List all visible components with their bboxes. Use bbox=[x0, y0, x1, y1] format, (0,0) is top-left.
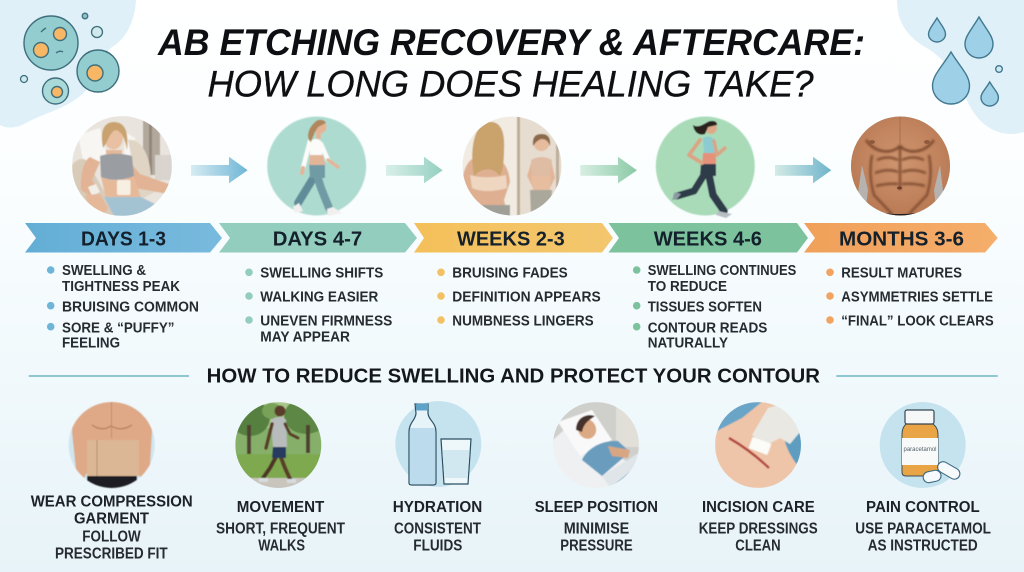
ribbon: weeks 4-6: WEEKS 4-6 bbox=[654, 228, 762, 251]
tip: movement: WALKS bbox=[258, 537, 305, 554]
photo: man walking in park bbox=[235, 402, 322, 488]
bullet list: days 4-7: MAY APPEAR bbox=[260, 329, 350, 345]
tip: incision care: KEEP DRESSINGS bbox=[699, 520, 818, 537]
bullet list: days 4-7 bbox=[245, 266, 393, 345]
tip: sleep position: MINIMISE bbox=[564, 520, 629, 537]
photo: final abs bbox=[850, 116, 952, 218]
bullet list: weeks 4-6: SWELLING CONTINUES bbox=[648, 263, 797, 279]
bullet list: days 4-7: WALKING EASIER bbox=[260, 290, 379, 306]
tip: pain control: AS INSTRUCTED bbox=[868, 537, 978, 554]
bullet list: weeks 2-3: DEFINITION APPEARS bbox=[452, 290, 601, 306]
tip: compression garment: WEAR COMPRESSION bbox=[31, 494, 193, 511]
bullet list: months 3-6: ASYMMETRIES SETTLE bbox=[841, 290, 993, 306]
photo: running bbox=[656, 116, 755, 218]
tip: hydration: FLUIDS bbox=[413, 537, 462, 554]
bullet list: months 3-6: “FINAL” LOOK CLEARS bbox=[841, 313, 994, 329]
icon: paracetamol bottle and pills: paracetamol bbox=[904, 446, 937, 453]
bullet list: weeks 4-6: NATURALLY bbox=[648, 336, 728, 352]
tip: compression garment: PRESCRIBED FIT bbox=[55, 545, 168, 562]
bullet list: weeks 4-6: TO REDUCE bbox=[648, 279, 727, 295]
photo: dressing an incision bbox=[715, 402, 802, 488]
bullet list: days 1-3: BRUISING COMMON bbox=[62, 300, 199, 316]
bullet list: weeks 2-3: NUMBNESS LINGERS bbox=[452, 313, 594, 329]
bullet list: days 1-3 bbox=[47, 263, 199, 352]
decorative blob top left with cells bbox=[0, 0, 136, 128]
ribbon: weeks 2-3 bbox=[414, 223, 613, 252]
section heading: HOW TO REDUCE SWELLING AND PROTECT YOUR CONTOUR bbox=[207, 366, 821, 388]
tip: pain control: USE PARACETAMOL bbox=[855, 520, 991, 537]
photo: mirror check bbox=[462, 116, 562, 216]
tip: hydration: CONSISTENT bbox=[394, 520, 481, 537]
icon: medium cell bbox=[77, 50, 119, 92]
bullet list: days 1-3: SORE & “PUFFY” bbox=[62, 320, 174, 336]
photo: man sleeping on back bbox=[553, 402, 640, 490]
tip: sleep position bbox=[535, 402, 658, 554]
bullet list: weeks 4-6 bbox=[633, 263, 797, 352]
icon: small cell bbox=[42, 78, 68, 104]
bullet list: weeks 2-3 bbox=[437, 266, 601, 329]
tip: sleep position: PRESSURE bbox=[560, 537, 633, 554]
ribbon: days 1-3 bbox=[25, 223, 222, 252]
icon: large cell bbox=[24, 16, 78, 70]
bullet list: days 1-3: TIGHTNESS PEAK bbox=[62, 279, 180, 295]
ribbon: months 3-6 bbox=[804, 223, 998, 252]
tip: movement: MOVEMENT bbox=[237, 499, 325, 516]
photo: resting after surgery bbox=[72, 116, 172, 216]
arrow: step 4 to 5 bbox=[775, 157, 831, 183]
tip: pain control bbox=[855, 402, 991, 554]
arrow: step 2 to 3 bbox=[386, 157, 443, 183]
tip: incision care bbox=[699, 402, 818, 554]
tip: incision care: CLEAN bbox=[735, 537, 781, 554]
ribbon: days 4-7: DAYS 4-7 bbox=[273, 228, 362, 251]
ribbon: weeks 2-3: WEEKS 2-3 bbox=[457, 228, 565, 251]
ribbon: days 4-7 bbox=[219, 223, 417, 252]
photo: waist binder bbox=[69, 398, 155, 490]
bullet list: days 4-7: UNEVEN FIRMNESS bbox=[260, 313, 393, 329]
icon: bubbles bbox=[20, 13, 102, 83]
tip: hydration bbox=[393, 401, 482, 554]
icon: water bottle and glass bbox=[395, 401, 481, 487]
bullet list: months 3-6: RESULT MATURES bbox=[841, 266, 962, 282]
arrow: step 3 to 4 bbox=[580, 157, 637, 183]
icon: paracetamol bottle and pills bbox=[880, 402, 966, 488]
tip: movement: SHORT, FREQUENT bbox=[216, 520, 345, 537]
ribbon: days 1-3: DAYS 1-3 bbox=[81, 228, 166, 251]
tip: compression garment: FOLLOW bbox=[82, 529, 141, 546]
title: AB ETCHING RECOVERY & AFTERCARE: bbox=[157, 22, 865, 63]
arrow: step 1 to 2 bbox=[191, 157, 248, 183]
bullet list: weeks 4-6: TISSUES SOFTEN bbox=[648, 300, 762, 316]
tip: compression garment: GARMENT bbox=[74, 510, 149, 527]
title bbox=[157, 22, 865, 105]
tip: movement bbox=[216, 398, 345, 554]
ribbon: weeks 4-6 bbox=[608, 223, 808, 252]
timeline: phase ribbons bbox=[25, 223, 998, 252]
decorative blob top right with water drops bbox=[897, 0, 1024, 134]
bullet list: weeks 2-3: BRUISING FADES bbox=[452, 266, 568, 282]
ribbon: months 3-6: MONTHS 3-6 bbox=[839, 228, 964, 251]
bullet list: days 4-7: SWELLING SHIFTS bbox=[260, 266, 384, 282]
bullet list: days 1-3: FEELING bbox=[62, 336, 120, 352]
title: HOW LONG DOES HEALING TAKE? bbox=[208, 64, 814, 105]
tip: pain control: PAIN CONTROL bbox=[866, 499, 980, 516]
tip: hydration: HYDRATION bbox=[393, 499, 482, 516]
bullet list: days 1-3: SWELLING & bbox=[62, 263, 146, 279]
tip: compression garment bbox=[31, 398, 193, 562]
photo: walking bbox=[267, 116, 366, 216]
icon: water drops bbox=[928, 17, 1002, 106]
bullet list: months 3-6 bbox=[826, 266, 994, 329]
tip: sleep position: SLEEP POSITION bbox=[535, 499, 658, 516]
bullet list: weeks 4-6: CONTOUR READS bbox=[648, 320, 768, 336]
tip: incision care: INCISION CARE bbox=[702, 499, 815, 516]
